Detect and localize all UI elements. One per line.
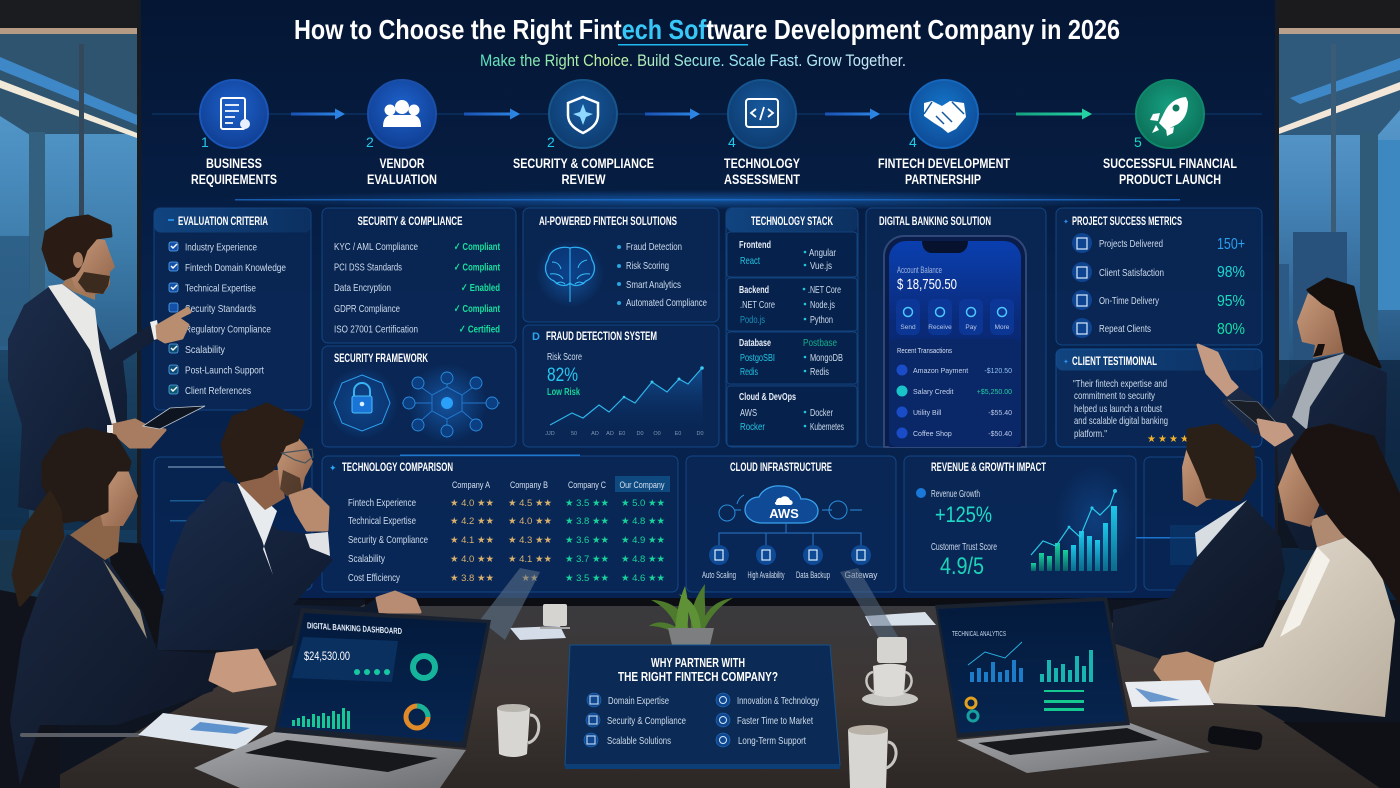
panel: technology comparison table <box>322 454 678 592</box>
panel: technology stack: Vue.js <box>810 260 832 272</box>
panel: revenue and growth impact: 4.9/5 <box>940 553 984 580</box>
paper on table left <box>138 713 268 750</box>
panel: technology stack: MongoDB <box>810 352 843 364</box>
laptop: technical analytics <box>935 597 1210 773</box>
person: seated woman right in cream blazer <box>1155 425 1400 788</box>
panel: AI-powered fintech solutions: Risk Scoring <box>626 260 669 272</box>
background: floor behind the table <box>0 600 1400 788</box>
panel: technology comparison table: ★ 3.8 ★★ <box>565 516 609 527</box>
panel: technology stack: .NET Core <box>808 284 841 296</box>
line chart: risk score: 50 <box>571 431 577 437</box>
panel: technology comparison table: TECHNOLOGY COMPARISON <box>342 462 453 474</box>
panel: technology stack: .NET Core <box>740 299 775 311</box>
panel: technology stack: Database <box>739 337 771 349</box>
panel: fraud detection system: 82% <box>547 365 578 386</box>
panel: project success metrics <box>1056 208 1262 345</box>
panel: technology comparison table: ★ 4.9 ★★ <box>621 535 665 546</box>
panel: client testimonial: helped us launch a robust <box>1074 403 1162 415</box>
phone mockup: Recent Transactions <box>897 346 952 355</box>
panel: technology stack: Rocker <box>740 421 765 433</box>
panel: project success metrics: 98% <box>1217 264 1245 281</box>
panel: security and compliance: ✓ Certified <box>459 324 500 336</box>
panel: revenue and growth impact: REVENUE & GROWTH IMPACT <box>931 462 1046 474</box>
step 5: fintech development partnership: PARTNERSHIP <box>905 172 981 187</box>
icon: security hexagon network <box>402 363 500 443</box>
sign: why partner with the right fintech company: WHY PARTNER WITH <box>651 656 745 670</box>
step 6: successful financial product launch: 5 <box>1134 134 1142 150</box>
phone mockup: -$55.40 <box>988 410 1012 417</box>
phone mockup: Amazon Payment <box>913 368 968 375</box>
step 4: technology assessment: ASSESSMENT <box>724 172 801 187</box>
panel: cloud infrastructure <box>686 456 896 592</box>
step 1: business requirements: BUSINESS <box>206 156 262 171</box>
sign: why partner with the right fintech company: Domain Expertise <box>608 695 669 707</box>
panel: security framework: SECURITY FRAMEWORK <box>334 353 428 365</box>
line chart: risk score: JJD <box>545 431 555 437</box>
panel: technology comparison table: ★ 4.0 ★★ <box>508 516 552 527</box>
sign: why partner with the right fintech company <box>565 645 840 769</box>
panel: fraud detection system: Risk Score <box>547 351 582 363</box>
panel: technology comparison table: ★ 3.5 ★★ <box>565 573 609 584</box>
panel: project success metrics: 80% <box>1217 321 1245 338</box>
panel: technology comparison table: Fintech Experience <box>348 497 416 509</box>
panel: technology comparison table: ★ 4.1 ★★ <box>450 535 494 546</box>
person: seated man right <box>1113 425 1285 660</box>
panel: security and compliance: ✓ Compliant <box>454 262 500 274</box>
coffee mug near left laptop <box>497 704 539 757</box>
panel: project success metrics: ✦ <box>1063 218 1069 226</box>
panel: cloud infrastructure: Gateway <box>844 570 878 580</box>
panel: security framework <box>322 346 516 447</box>
panel: technology stack: Node.js <box>810 299 835 311</box>
panel: technology stack: Python <box>810 314 833 326</box>
sign: why partner with the right fintech company: Innovation & Technology <box>737 695 820 707</box>
panel: technology comparison table: ★ 3.7 ★★ <box>565 554 609 565</box>
step 2: vendor evaluation: 2 <box>366 134 374 150</box>
panel: technology stack: Cloud & DevOps <box>739 391 796 403</box>
panel: project success metrics: Repeat Clients <box>1099 323 1151 335</box>
arrow 2 to 3 <box>464 108 520 120</box>
laptop: technical analytics: TECHNICAL ANALYTICS <box>952 631 1006 638</box>
arrow 1 to 2 <box>291 108 345 120</box>
panel: technology comparison table: ★ 4.2 ★★ <box>450 516 494 527</box>
right mugs and saucers <box>848 637 918 788</box>
panel: technology comparison table: ★★ <box>521 573 539 584</box>
phone mockup: Coffee Shop <box>913 431 952 438</box>
panel: client testimonial: "Their fintech expertise and <box>1073 378 1167 390</box>
panel: revenue and growth impact: +125% <box>935 502 992 527</box>
panel: AI-powered fintech solutions: AI-POWERED FINTECH SOLUTIONS <box>539 216 677 228</box>
laptop: digital banking dashboard: $24,530.00 <box>304 649 350 663</box>
step 1: business requirements <box>191 80 277 187</box>
laptop: digital banking dashboard: DIGITAL BANKING DASHBOARD <box>307 620 402 636</box>
panel: security and compliance: ✓ Compliant <box>454 303 500 315</box>
panel: technology comparison table: ★ 4.0 ★★ <box>450 554 494 565</box>
panel: security and compliance: ISO 27001 Certification <box>334 324 418 336</box>
panel: technology comparison table: Company B <box>510 480 548 491</box>
panel: evaluation criteria: Regulatory Compliance <box>185 324 271 336</box>
secondary laptops at centre <box>480 568 900 640</box>
panel: technology comparison table: ★ 5.0 ★★ <box>621 498 665 509</box>
conference table <box>36 598 1400 788</box>
sign: why partner with the right fintech company: Security & Compliance <box>607 715 686 727</box>
panel: security and compliance: PCI DSS Standards <box>334 262 402 274</box>
panel: project success metrics: Projects Delivered <box>1099 238 1163 250</box>
panel: cloud infrastructure: Data Backup <box>796 570 830 580</box>
panel: client testimonial: CLIENT TESTIMOINAL <box>1072 356 1157 368</box>
divider line under flow <box>235 199 1180 200</box>
sign: why partner with the right fintech company: THE RIGHT FINTECH COMPANY? <box>618 670 778 684</box>
panel: evaluation criteria: Industry Experience <box>185 242 257 254</box>
panel: blank dashboard right <box>1136 457 1262 590</box>
phone mockup: +$5,250.00 <box>977 389 1012 396</box>
person: standing presenter man <box>8 216 205 530</box>
phone mockup: -$50.40 <box>988 431 1012 438</box>
panel: evaluation criteria: Technical Expertise <box>185 282 256 294</box>
panel: technology stack: Podo.js <box>740 314 765 326</box>
step 1: business requirements: REQUIREMENTS <box>191 172 277 187</box>
panel: cloud infrastructure: Auto Scaling <box>702 570 736 580</box>
small cup behind centre <box>540 604 570 629</box>
line chart: risk score: O0 <box>653 431 661 437</box>
step 2: vendor evaluation <box>366 80 437 187</box>
phone mockup: Account Balance <box>897 265 942 275</box>
arrow 3 to 4 <box>645 108 700 120</box>
panel: technology stack: Frontend <box>739 239 771 251</box>
phone mockup: More <box>995 324 1010 331</box>
line chart: risk score: E0 <box>619 431 625 437</box>
icon: AWS cloud <box>719 486 862 523</box>
chair behind seated woman <box>110 543 163 642</box>
panel: technology comparison table: Cost Efficiency <box>348 572 401 584</box>
step 3: security and compliance review: SECURITY & COMPLIANCE <box>513 156 654 171</box>
heading: main title: How to Choose the Right Fintech Software Development Company in 2026 <box>294 14 1120 45</box>
panel: evaluation criteria: Client References <box>185 385 251 397</box>
line chart: risk score: AD <box>606 431 614 437</box>
line chart: risk score: E0 <box>675 431 681 437</box>
step 2: vendor evaluation: VENDOR <box>380 156 425 171</box>
panel: project success metrics: Client Satisfaction <box>1099 267 1164 279</box>
step 3: security and compliance review: REVIEW <box>562 172 606 187</box>
phone mockup: $ 18,750.50 <box>897 276 957 293</box>
subtitle: Make the Right Choice. Build Secure. Scale Fast. Grow Together. <box>480 51 906 70</box>
process flow: six steps <box>152 80 1262 187</box>
panel: technology comparison table: ★ 4.8 ★★ <box>621 516 665 527</box>
panel: technology stack: Backend <box>739 284 769 296</box>
panel: technology comparison table: ★ 4.1 ★★ <box>508 554 552 565</box>
phone mockup <box>884 236 1026 447</box>
phone mockup: Receive <box>928 324 952 331</box>
chart: revenue bars and line <box>1031 465 1135 575</box>
panel: technology comparison table: ★ 4.0 ★★ <box>450 498 494 509</box>
panel: digital banking solution: DIGITAL BANKING SOLUTION <box>879 216 991 228</box>
panel: technology stack: TECHNOLOGY STACK <box>751 216 833 228</box>
panel: AI-powered fintech solutions: Automated Compliance <box>626 297 707 309</box>
step 6: successful financial product launch: SUCCESSFUL FINANCIAL <box>1103 156 1237 171</box>
step 5: fintech development partnership <box>878 80 1011 187</box>
panel: technology stack: Redis <box>810 366 829 378</box>
icon: lock in octagon <box>326 367 398 439</box>
panel: security and compliance: KYC / AML Compliance <box>334 241 418 253</box>
panel: technology stack: Postbase <box>803 337 837 349</box>
panel: AI-powered fintech solutions <box>523 208 719 322</box>
step 1: business requirements: 1 <box>201 134 209 150</box>
phone mockup: Salary Credit <box>913 389 954 396</box>
panel: project success metrics: 95% <box>1217 293 1245 310</box>
panel: cloud infrastructure: High Availability <box>748 570 785 580</box>
panel: client testimonial: ★★★★ <box>1147 434 1189 445</box>
step 4: technology assessment: TECHNOLOGY <box>724 156 800 171</box>
panel: technology comparison table: Company A <box>452 480 491 491</box>
panel: cloud infrastructure: CLOUD INFRASTRUCTURE <box>730 462 832 474</box>
paper on table right <box>510 612 1214 707</box>
panel: fraud detection system: D <box>532 331 540 343</box>
title underline accent <box>618 44 748 46</box>
panel: technology stack: Redis <box>740 366 758 378</box>
step 2: vendor evaluation: EVALUATION <box>367 172 437 187</box>
sign: why partner with the right fintech company: Scalable Solutions <box>607 735 671 747</box>
panel: evaluation criteria <box>154 208 311 410</box>
arrow 4 to 5 <box>825 108 880 120</box>
step 6: successful financial product launch <box>1103 80 1237 187</box>
panel: digital banking solution <box>866 208 1046 447</box>
panel: technology comparison table: Technical Expertise <box>348 515 416 527</box>
panel: technology stack: Kubernetes <box>810 421 844 433</box>
panel: project success metrics: PROJECT SUCCESS METRICS <box>1072 216 1182 228</box>
panel: AI-powered fintech solutions: Fraud Detection <box>626 241 682 253</box>
panel: client testimonial: ✦ <box>1063 358 1069 366</box>
panel: evaluation criteria: Fintech Domain Knowledge <box>185 262 286 274</box>
step 3: security and compliance review: 2 <box>547 134 555 150</box>
sign: why partner with the right fintech company: Long-Term Support <box>738 735 806 747</box>
line chart: risk score: D0 <box>636 431 644 437</box>
panel: technology comparison table: ★ 4.3 ★★ <box>508 535 552 546</box>
panel: blank dashboard left <box>154 457 312 590</box>
panel: technology comparison table: Security & Compliance <box>348 534 428 546</box>
icon: glowing brain <box>536 240 604 308</box>
phone mockup: Pay <box>965 324 977 331</box>
line chart: risk score: AD <box>591 431 599 437</box>
step 5: fintech development partnership: FINTECH DEVELOPMENT <box>878 156 1011 171</box>
background: left office window <box>0 0 140 788</box>
panel: AI-powered fintech solutions: Smart Analytics <box>626 279 681 291</box>
panel: security and compliance: ✓ Enabled <box>461 282 500 294</box>
step 6: successful financial product launch: PRODUCT LAUNCH <box>1119 172 1221 187</box>
panel: revenue and growth impact: Customer Trust Score <box>931 541 997 553</box>
panel: technology comparison table: Company C <box>568 480 606 491</box>
panel: client testimonial <box>1056 349 1262 447</box>
wall display screen <box>137 0 1279 600</box>
panel: evaluation criteria: Scalability <box>185 344 226 356</box>
panel: project success metrics: 150+ <box>1217 236 1245 253</box>
panel: technology stack: PostgoSBI <box>740 352 775 364</box>
desk plant <box>649 584 733 645</box>
panel: client testimonial: commitment to security <box>1074 390 1156 402</box>
person: seated woman left <box>0 429 275 788</box>
line chart: risk score <box>545 366 704 437</box>
panel: technology comparison table: ★ 3.5 ★★ <box>565 498 609 509</box>
panel: fraud detection system: Low Risk <box>547 387 580 398</box>
laptop: digital banking dashboard <box>194 608 491 788</box>
step 4: technology assessment <box>724 80 801 187</box>
background: right office window <box>1278 0 1400 788</box>
line chart: risk score: D0 <box>696 431 704 437</box>
panel: technology stack: AWS <box>740 407 757 419</box>
panel: security and compliance: ✓ Compliant <box>454 241 500 253</box>
panel: revenue and growth impact: Revenue Growth <box>931 488 980 500</box>
panel: technology comparison table: Our Company <box>620 480 665 491</box>
panel: technology stack: Docker <box>810 407 833 419</box>
sign: why partner with the right fintech company: Faster Time to Market <box>737 715 813 727</box>
panel: client testimonial: platform." <box>1074 428 1107 440</box>
step 3: security and compliance review <box>513 80 654 187</box>
panel: security and compliance: SECURITY & COMPLIANCE <box>358 216 463 228</box>
arrow 5 to 6 <box>1016 108 1092 120</box>
panel: evaluation criteria: EVALUATION CRITERIA <box>178 216 268 228</box>
panel: fraud detection system <box>523 325 719 447</box>
panel: technology stack: Angular <box>809 247 836 259</box>
person: standing woman right <box>1198 279 1387 550</box>
panel: evaluation criteria: Security Standards <box>185 303 256 315</box>
panel: technology stack: React <box>740 255 760 267</box>
panel: technology comparison table: Scalability <box>348 553 386 565</box>
phone mockup: Send <box>900 324 916 331</box>
panel: fraud detection system: FRAUD DETECTION SYSTEM <box>546 331 657 343</box>
phone on table <box>1207 725 1263 751</box>
step 5: fintech development partnership: 4 <box>909 134 917 150</box>
panel: technology comparison table: ★ 4.5 ★★ <box>508 498 552 509</box>
panel: security and compliance <box>322 208 516 343</box>
icon: AWS cloud: AWS <box>769 506 799 521</box>
panel: revenue and growth impact <box>904 456 1136 592</box>
phone mockup: Utility Bill <box>913 410 942 417</box>
panel: project success metrics: On-Time Delivery <box>1099 295 1160 307</box>
person: seated man with glasses <box>157 404 420 650</box>
panel: technology stack <box>726 208 858 447</box>
panel: technology comparison table: ★ 4.8 ★★ <box>621 554 665 565</box>
step 4: technology assessment: 4 <box>728 134 736 150</box>
panel: technology comparison table: ★ 4.6 ★★ <box>621 573 665 584</box>
panel: technology comparison table: ★ 3.8 ★★ <box>450 573 494 584</box>
panel: client testimonial: and scalable digital banking <box>1074 415 1168 427</box>
phone mockup: -$120.50 <box>984 368 1012 375</box>
panel: evaluation criteria: Post-Launch Support <box>185 364 264 376</box>
panel: security and compliance: Data Encryption <box>334 282 391 294</box>
panel: technology comparison table: ✦ <box>329 463 337 473</box>
panel: technology comparison table: ★ 3.6 ★★ <box>565 535 609 546</box>
panel: security and compliance: GDPR Compliance <box>334 303 400 315</box>
